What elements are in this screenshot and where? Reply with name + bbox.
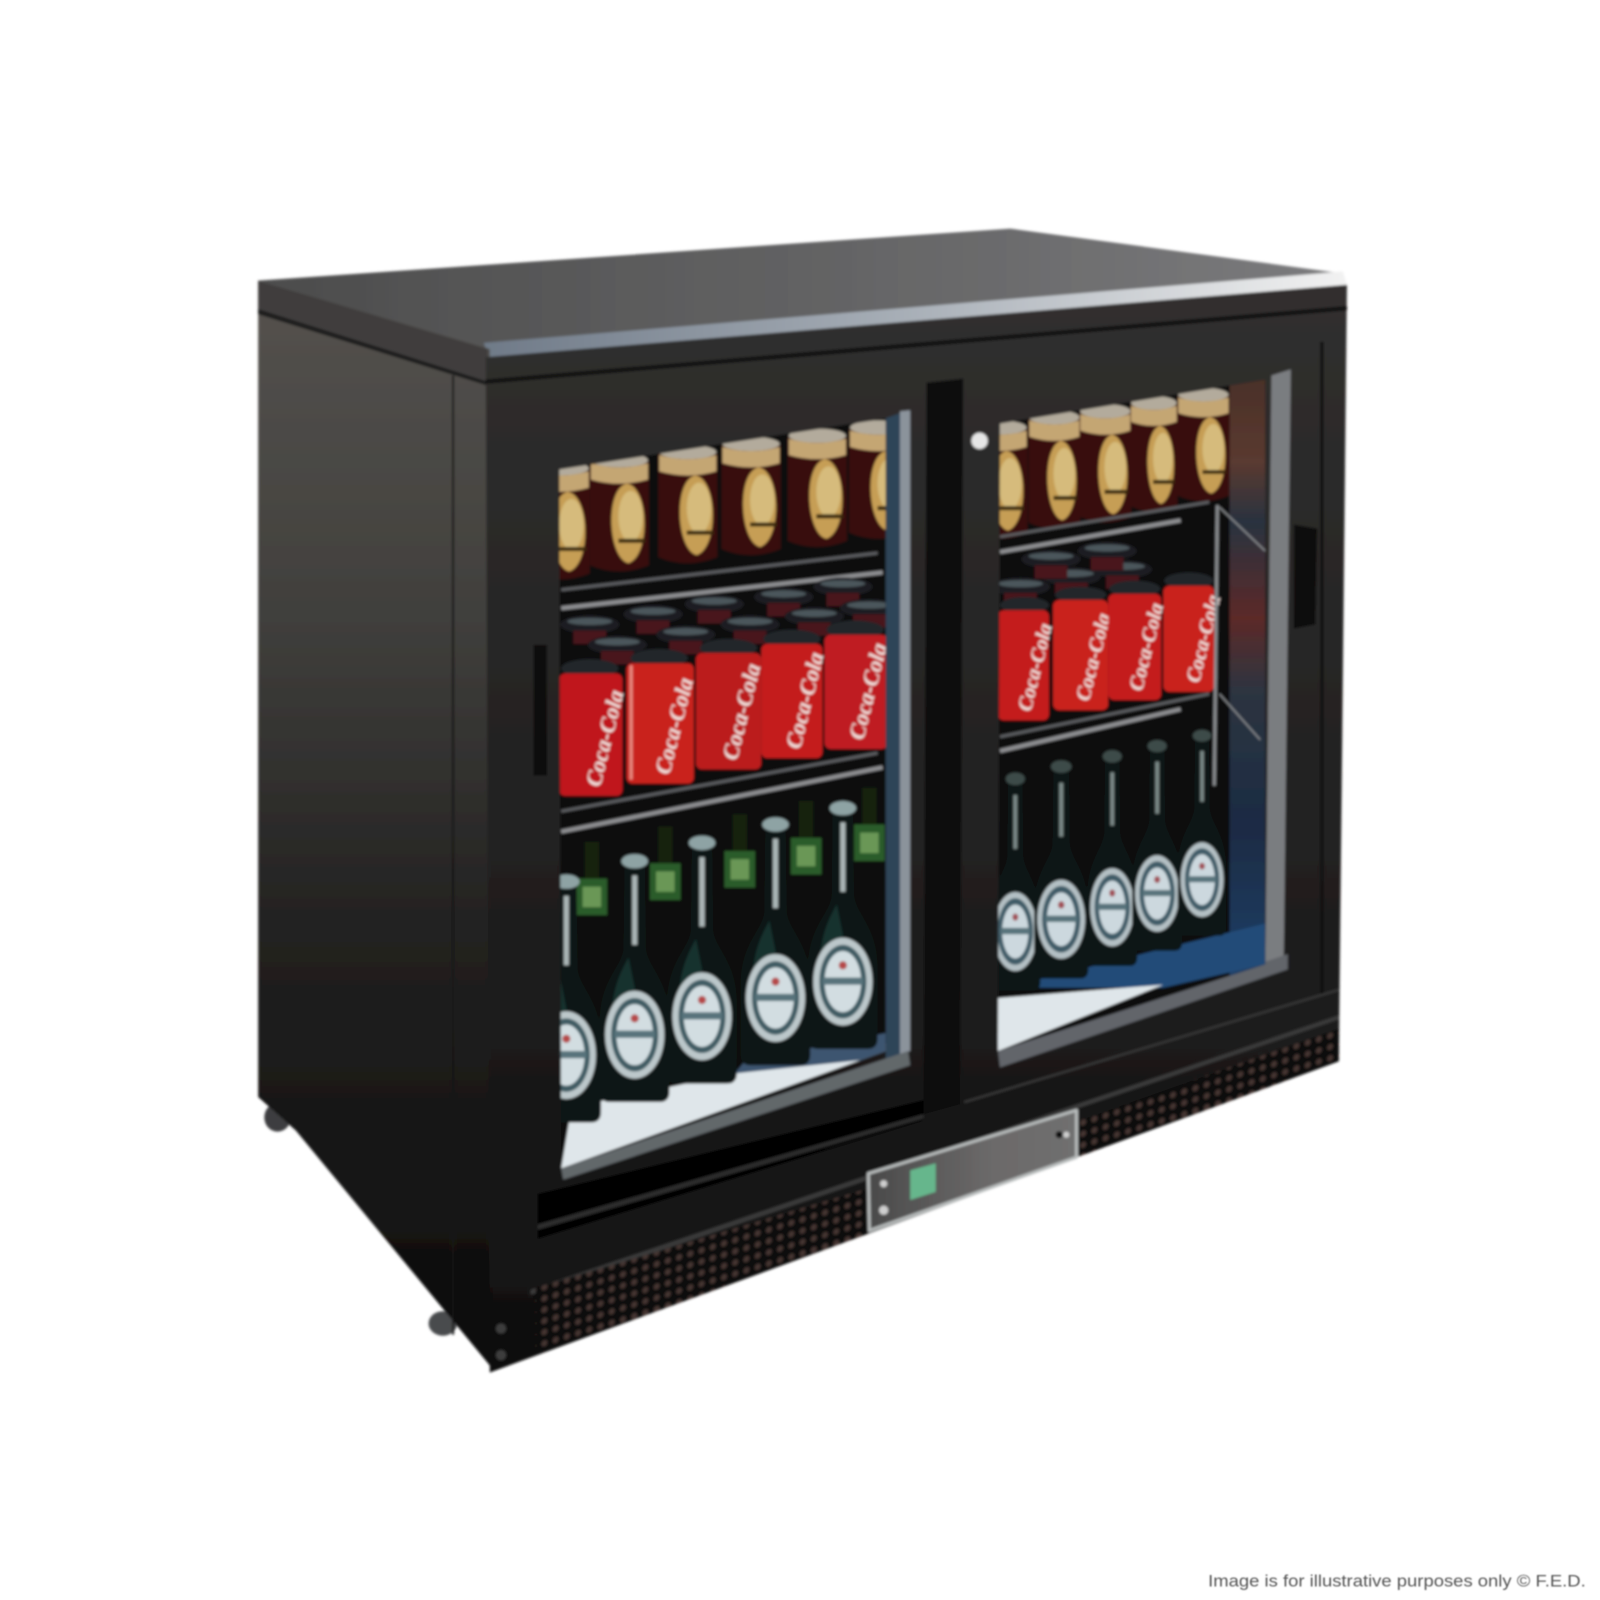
middle shelf rails [1000, 694, 1209, 751]
top shelf rails [561, 553, 883, 608]
front coke cans: Coca-Cola [844, 640, 892, 742]
top shelf gold cans [971, 388, 1229, 539]
front coke cans: Coca-Cola [717, 661, 765, 762]
panel screw [1056, 1131, 1063, 1138]
front face [486, 285, 1347, 1372]
top shelf rails [1000, 502, 1209, 552]
fridge cabinet and doors [258, 229, 1347, 1372]
blue floor [1005, 923, 1265, 988]
front coke cans: Coca-Cola [581, 687, 629, 789]
temperature display [910, 1163, 936, 1200]
left side panel [258, 281, 494, 1370]
centre post [923, 379, 963, 1114]
foot: rear left [264, 1103, 291, 1132]
left door handle [534, 645, 547, 776]
right door outer channel [1320, 342, 1323, 995]
left door [533, 408, 913, 1181]
front bottles [532, 801, 878, 1122]
shelf upright and reflections [1214, 505, 1265, 786]
rear coke can tops [991, 542, 1152, 606]
front bottles [990, 730, 1226, 991]
vent grille: right [1080, 1029, 1339, 1156]
right door glass edge [1265, 369, 1291, 967]
panel buttons [879, 1132, 1069, 1215]
disclaimer caption: Image is for illustrative purposes only © F.E.D. [1208, 1572, 1586, 1591]
lit floor [561, 1041, 898, 1168]
front coke cans: Coca-Cola [1125, 601, 1168, 693]
control panel [868, 1110, 1077, 1231]
right door [960, 342, 1323, 1104]
lower rail highlight [538, 1114, 923, 1230]
front coke cans [998, 572, 1225, 720]
front coke cans: Coca-Cola [1182, 593, 1225, 685]
foot: front left [429, 1311, 457, 1336]
product illustration: two-door bar fridge [256, 226, 1585, 1591]
right door interior [995, 380, 1267, 1052]
glass reflection [1230, 378, 1270, 980]
lit floor [998, 985, 1163, 1051]
vent grille: left [536, 1189, 867, 1355]
front coke cans [559, 620, 892, 796]
front coke cans: Coca-Cola [781, 650, 829, 751]
middle shelf rails [561, 753, 883, 832]
rear coke can tops [560, 578, 899, 664]
left door frame [520, 380, 927, 1204]
lower base trim [531, 1015, 1339, 1295]
corner bolts [496, 1323, 506, 1360]
bottom door rail slot [538, 1100, 923, 1239]
front coke cans: Coca-Cola [1014, 621, 1057, 713]
front coke cans: Coca-Cola [1072, 611, 1115, 703]
right door frame [960, 342, 1322, 1104]
right door handle [1294, 524, 1317, 629]
key lock [971, 433, 988, 449]
lit front edge of top [484, 271, 1347, 358]
front coke cans: Coca-Cola [650, 675, 698, 777]
right door lower trim line [964, 990, 1339, 1102]
top shelf gold cans [531, 420, 908, 580]
rear green bottles [574, 786, 886, 1059]
upper front trim [486, 306, 1347, 384]
cabinet top surface [258, 229, 1343, 349]
left door interior [557, 418, 888, 1170]
left door glass edge [886, 410, 908, 1061]
